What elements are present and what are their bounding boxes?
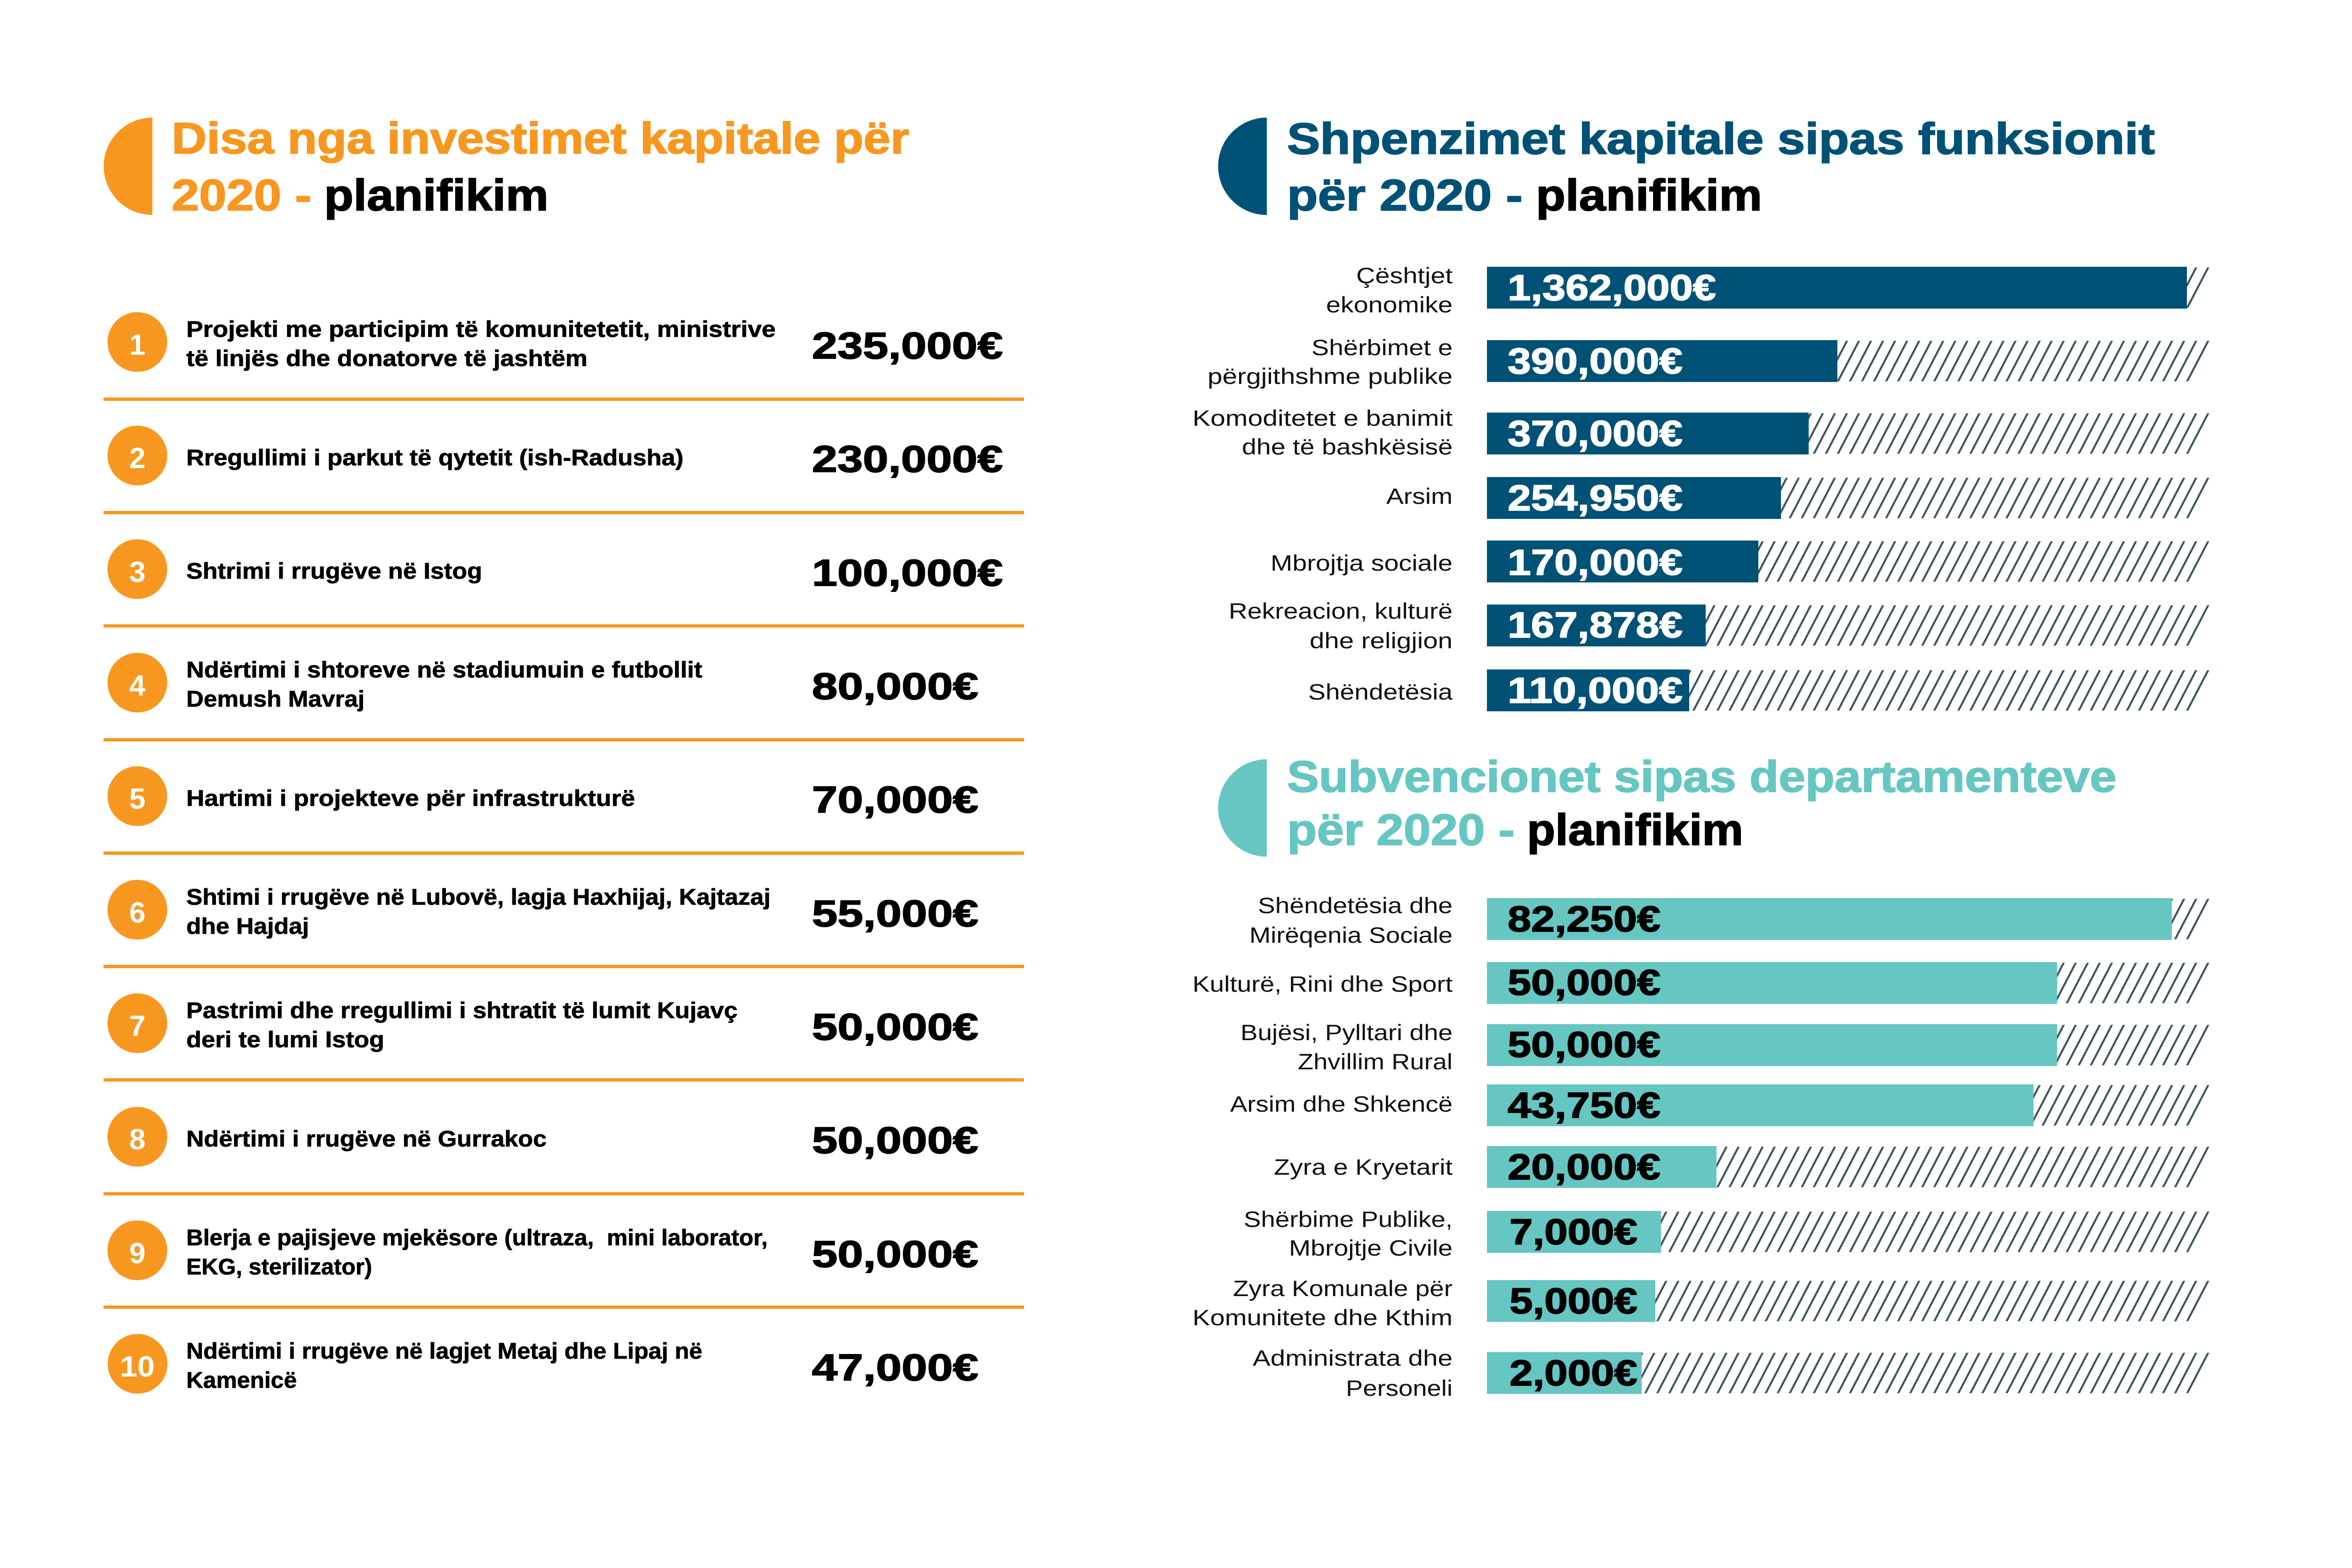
bar row: culture, youth and sport xyxy=(1192,962,2199,1004)
bar row: general public services: përgjithshme publike xyxy=(1208,364,1453,389)
bar row: housing and community: 370,000€ xyxy=(1508,414,1683,454)
icon: teal half circle xyxy=(1218,759,1267,857)
list item 8 xyxy=(107,1107,978,1167)
bar row: economic affairs: ekonomike xyxy=(1326,292,1453,317)
list item 10: 10 xyxy=(120,1351,155,1383)
list item 6: Shtimi i rrugëve në Lubovë, lagja Haxhijaj, Kajtazaj xyxy=(186,885,771,910)
list item 2: 230,000€ xyxy=(812,438,1003,480)
bar row: public services, civil protection: Mbrojtje Civile xyxy=(1289,1235,1453,1260)
bar row: education xyxy=(1386,477,2199,519)
bar chart: subsidies by department xyxy=(1192,893,2199,1401)
bar row: general public services: 390,000€ xyxy=(1508,341,1683,382)
list item 3 xyxy=(107,539,1003,599)
bar row: administration and personnel: Personeli xyxy=(1346,1376,1453,1401)
list item 9 xyxy=(107,1220,978,1280)
bar row: mayor's office: 20,000€ xyxy=(1508,1147,1661,1187)
list item 4: Ndërtimi i shtoreve në stadiumuin e futbollit xyxy=(186,658,702,683)
list item 8: 8 xyxy=(129,1123,145,1156)
list item 1: 1 xyxy=(129,329,145,361)
panel: capital expenditure by function xyxy=(1192,114,2199,711)
bar row: recreation, culture and religion xyxy=(1229,598,2199,653)
list item 2 xyxy=(107,426,1003,486)
list item 4: 4 xyxy=(129,669,146,702)
bar row: health and social welfare xyxy=(1249,893,2199,947)
heading: subsidies by department: për 2020 - xyxy=(1287,805,1515,854)
bar row: housing and community: Komoditetet e banimit xyxy=(1192,406,1453,430)
bar row: social protection: 170,000€ xyxy=(1508,542,1683,583)
bar row: education and science xyxy=(1230,1084,2199,1126)
heading: capital expenditure by function: Shpenzimet kapitale sipas funksionit xyxy=(1287,114,2155,163)
bar row: culture, youth and sport: 50,000€ xyxy=(1508,963,1661,1003)
list item 9: 9 xyxy=(129,1237,145,1270)
bar row: administration and personnel: 2,000€ xyxy=(1510,1353,1637,1393)
list item 10 xyxy=(108,1334,978,1393)
list item 8: Ndërtimi i rrugëve në Gurrakoc xyxy=(186,1127,547,1152)
list item 9: EKG, sterilizator) xyxy=(186,1255,372,1280)
bar row: housing and community: dhe të bashkësisë xyxy=(1242,434,1453,459)
list item 7: deri te lumi Istog xyxy=(186,1027,384,1052)
bar row: mayor's office xyxy=(1274,1146,2199,1188)
list item 7: 50,000€ xyxy=(812,1006,978,1048)
list item 4: 80,000€ xyxy=(812,665,978,707)
bar row: recreation, culture and religion: 167,878€ xyxy=(1508,605,1683,645)
icon: orange half circle xyxy=(104,118,152,215)
panel: subsidies by department xyxy=(1192,752,2199,1401)
bar row: communities and return office: 5,000€ xyxy=(1510,1281,1637,1321)
list item 4 xyxy=(107,653,978,712)
bar row: culture, youth and sport: Kulturë, Rini dhe Sport xyxy=(1192,971,1453,996)
heading: capital investments: Disa nga investimet kapitale për xyxy=(172,113,909,163)
bar row: education and science: 43,750€ xyxy=(1508,1085,1661,1126)
bar row: social protection: Mbrojtja sociale xyxy=(1271,550,1453,575)
bar row: health: Shëndetësia xyxy=(1308,679,1453,704)
heading: capital investments: 2020 - xyxy=(172,170,311,220)
list item 1 xyxy=(107,312,1003,372)
bar row: housing and community xyxy=(1192,406,2199,459)
list item 7: 7 xyxy=(129,1010,145,1043)
heading: subsidies by department: planifikim xyxy=(1527,805,1743,854)
heading: subsidies by department xyxy=(1287,752,2116,854)
bar row: economic affairs xyxy=(1326,263,2199,317)
list item 3: 3 xyxy=(129,556,145,589)
bar row: recreation, culture and religion: dhe religjion xyxy=(1310,628,1453,653)
list item 6: 6 xyxy=(129,897,145,929)
list item 6: 55,000€ xyxy=(812,892,978,934)
heading: subsidies by department: Subvencionet sipas departamenteve xyxy=(1287,752,2116,801)
bar row: economic affairs: 1,362,000€ xyxy=(1508,268,1716,308)
list item 7 xyxy=(107,994,978,1053)
list item 7: Pastrimi dhe rregullimi i shtratit të lumit Kujavç xyxy=(186,998,738,1023)
bar row: communities and return office: Komunitete dhe Kthim xyxy=(1192,1305,1453,1330)
bar row: agriculture, forestry and rural development: Zhvillim Rural xyxy=(1298,1049,1453,1074)
bar row: health: 110,000€ xyxy=(1508,670,1683,711)
bar row: health and social welfare: Shëndetësia dhe xyxy=(1258,893,1453,918)
bar row: general public services xyxy=(1208,335,2199,389)
bar row: economic affairs: Çështjet xyxy=(1356,263,1453,288)
list item 2: Rregullimi i parkut të qytetit (ish-Radusha) xyxy=(186,446,683,470)
bar row: health and social welfare: 82,250€ xyxy=(1508,899,1661,939)
bar row: health and social welfare: Mirëqenia Sociale xyxy=(1249,923,1453,947)
list item 5 xyxy=(107,766,978,826)
list item 1: të linjës dhe donatorve të jashtëm xyxy=(186,346,588,371)
icon: navy half circle xyxy=(1218,118,1267,215)
list item 8: 50,000€ xyxy=(812,1119,978,1161)
list item 3: 100,000€ xyxy=(812,552,1003,594)
bar row: public services, civil protection: 7,000€ xyxy=(1510,1212,1637,1252)
bar row: communities and return office xyxy=(1192,1276,2199,1330)
list item 1: 235,000€ xyxy=(812,325,1003,366)
bar row: education and science: Arsim dhe Shkencë xyxy=(1230,1091,1453,1116)
list item 9: Blerja e pajisjeve mjekësore (ultraza, mini laborator, xyxy=(186,1226,768,1250)
bar row: agriculture, forestry and rural development: 50,000€ xyxy=(1508,1025,1661,1065)
bar row: agriculture, forestry and rural development xyxy=(1240,1020,2199,1074)
list item 10: Kamenicë xyxy=(186,1368,297,1393)
panel: capital investments list xyxy=(103,113,1024,1393)
bar row: education: Arsim xyxy=(1386,484,1453,509)
list item 2: 2 xyxy=(129,442,145,475)
bar row: administration and personnel xyxy=(1253,1345,2199,1401)
bar row: public services, civil protection xyxy=(1244,1207,2199,1260)
list item 10: 47,000€ xyxy=(812,1346,978,1388)
bar row: administration and personnel: Administrata dhe xyxy=(1253,1345,1453,1370)
bar row: health xyxy=(1308,669,2199,711)
list item 6 xyxy=(107,880,978,939)
bar chart: expenditure by function xyxy=(1192,263,2199,711)
bar row: social protection xyxy=(1271,541,2199,583)
list item 5: Hartimi i projekteve për infrastrukturë xyxy=(186,786,635,811)
heading: capital expenditure by function: planifikim xyxy=(1536,170,1762,220)
bar row: mayor's office: Zyra e Kryetarit xyxy=(1274,1154,1453,1179)
list item 9: 50,000€ xyxy=(812,1233,978,1275)
list item 4: Demush Mavraj xyxy=(186,687,365,712)
bar row: recreation, culture and religion: Rekreacion, kulturë xyxy=(1229,598,1453,623)
list item 3: Shtrimi i rrugëve në Istog xyxy=(186,559,482,584)
list item 5: 5 xyxy=(129,783,145,815)
list item 6: dhe Hajdaj xyxy=(186,914,309,939)
heading: capital investments: planifikim xyxy=(324,170,548,220)
list item 10: Ndërtimi i rrugëve në lagjet Metaj dhe Lipaj në xyxy=(186,1339,702,1364)
bar row: public services, civil protection: Shërbime Publike, xyxy=(1244,1207,1453,1232)
bar row: general public services: Shërbimet e xyxy=(1311,335,1453,360)
list item 5: 70,000€ xyxy=(812,779,978,820)
heading: capital investments xyxy=(172,113,909,220)
bar row: communities and return office: Zyra Komunale për xyxy=(1233,1276,1453,1301)
heading: capital expenditure by function: për 2020 - xyxy=(1287,170,1523,220)
list item 1: Projekti me participim të komunitetetit, ministrive xyxy=(186,317,776,342)
bar row: agriculture, forestry and rural development: Bujësi, Pylltari dhe xyxy=(1240,1020,1453,1045)
bar row: education: 254,950€ xyxy=(1508,478,1683,518)
heading: capital expenditure by function xyxy=(1287,114,2155,220)
